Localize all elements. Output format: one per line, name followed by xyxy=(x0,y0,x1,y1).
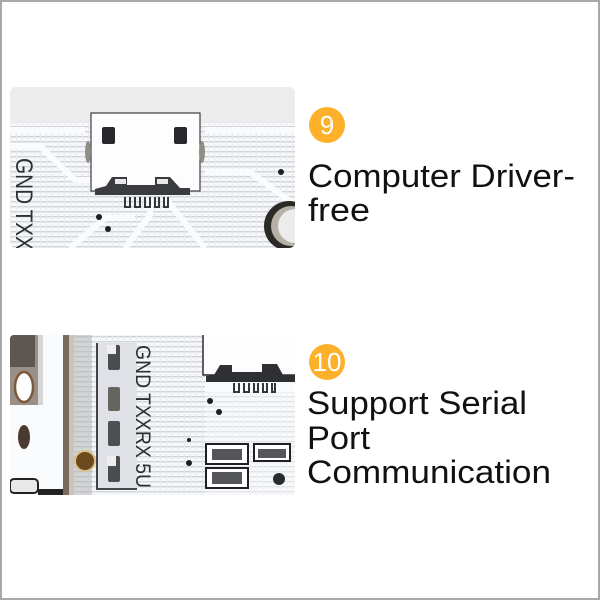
panel: serial port header photo xyxy=(10,335,295,495)
icon: SMD resistors xyxy=(206,444,290,488)
icon: solder tabs xyxy=(85,141,205,163)
heading: Computer Driver-free: Computer Driver- xyxy=(308,158,575,194)
panel: micro USB connector photo xyxy=(10,87,314,251)
icon: USB connector xyxy=(203,335,295,392)
heading: Computer Driver-free: free xyxy=(308,192,370,228)
heading: Support Serial Port Communication: Support Serial xyxy=(307,385,527,421)
icon: micro USB connector xyxy=(91,113,200,207)
icon: board edge strip xyxy=(63,335,95,495)
badge: number 10 xyxy=(309,344,345,380)
icon: via holes xyxy=(96,169,284,232)
icon: via holes xyxy=(186,398,222,466)
icon: four pin header xyxy=(97,343,137,489)
badge: number 9 xyxy=(309,107,345,143)
icon: capacitor xyxy=(264,201,295,248)
silkscreen label: GND TXD: GND TXX xyxy=(10,158,37,250)
icon: left metal part xyxy=(10,335,68,495)
heading: Support Serial Port Communication: Port xyxy=(307,420,370,456)
heading: Support Serial Port Communication: Communication xyxy=(307,454,551,490)
badge: number 10: 10 xyxy=(312,347,342,377)
badge: number 9: 9 xyxy=(320,110,334,140)
silkscreen label: GND TXD RXD 5V: GND TXXRX 5U xyxy=(131,345,154,488)
